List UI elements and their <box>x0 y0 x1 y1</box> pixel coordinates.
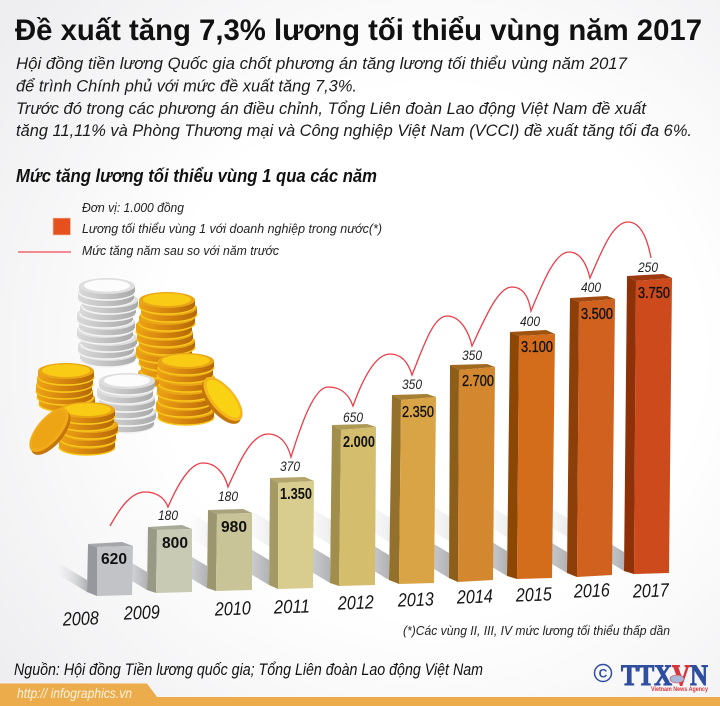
leaning coin right <box>194 371 250 430</box>
bar 2017 <box>624 274 672 574</box>
year labels: 2016 <box>573 580 611 603</box>
bar 2012 <box>330 424 376 586</box>
bar chart <box>87 274 672 596</box>
intro text block: để trình Chính phủ với mức đề xuất tăng 7,3%. <box>16 76 357 96</box>
year labels <box>62 580 670 631</box>
year labels: 2014 <box>456 586 493 609</box>
intro text block: Trước đó trong các phương án điều chỉnh, Tổng Liên đoàn Lao động Việt Nam đề xuất <box>16 99 647 118</box>
increase labels: 400 <box>581 280 601 295</box>
intro text block: Hội đồng tiền lương Quốc gia chốt phương án tăng lương tối thiểu vùng năm 2017 <box>16 54 628 73</box>
illustration: coin stacks <box>22 278 250 461</box>
footnote: (*)Các vùng II, III, IV mức lương tối thiểu thấp dần <box>403 623 670 638</box>
bar 2014 <box>449 364 495 582</box>
year labels: 2011 <box>273 596 310 619</box>
gold coin stack left <box>36 363 95 412</box>
bar 2009 <box>147 525 192 593</box>
leaning coin left <box>22 402 78 461</box>
bar shadows <box>57 497 624 592</box>
website url: http:// infographics.vn <box>17 685 132 701</box>
increase labels: 350 <box>462 348 482 363</box>
silver coin stack <box>77 278 138 367</box>
bar 2008: 620 <box>101 551 127 568</box>
bar 2015 <box>507 330 555 579</box>
bar 2014: 2.700 <box>462 373 494 390</box>
bar 2016 <box>567 296 615 577</box>
red increase arcs <box>110 222 651 526</box>
year labels: 2013 <box>397 589 435 612</box>
small silver coin stack <box>97 373 156 433</box>
bar 2011 <box>269 477 314 589</box>
bar 2008 <box>87 542 133 596</box>
year labels: 2017 <box>632 580 670 603</box>
copyright icon: C <box>599 666 608 680</box>
agency tagline: Vietnam News Agency <box>651 686 708 693</box>
bar 2017: 3.750 <box>638 285 670 302</box>
year labels: 2008 <box>62 608 100 631</box>
year labels: 2012 <box>337 592 375 615</box>
agency wordmark: TTXVN <box>621 659 708 692</box>
globe mark <box>670 675 684 683</box>
intro text block: tăng 11,11% và Phòng Thương mại và Công nghiệp Việt Nam (VCCI) đề xuất tăng tối đa 6%. <box>16 121 692 140</box>
legend unit: Đơn vị: 1.000 đồng <box>82 200 185 215</box>
increase labels: 250 <box>637 260 658 275</box>
legend label: yearly increase: Mức tăng năm sau so với năm trước <box>82 243 279 258</box>
bar 2009: 800 <box>162 535 188 552</box>
year labels: 2009 <box>123 602 161 625</box>
logo: copyright TTXVN <box>594 659 708 693</box>
source: Nguồn: Hội đồng Tiền lương quốc gia; Tổng Liên đoàn Lao động Việt Nam <box>14 661 483 679</box>
legend label: minimum wage: Lương tối thiểu vùng 1 với doanh nghiệp trong nước(*) <box>82 221 382 236</box>
bar 2013: 2.350 <box>402 404 434 421</box>
increase labels: 350 <box>402 377 422 392</box>
bar 2012: 2.000 <box>343 434 375 451</box>
legend swatch: minimum wage <box>53 218 70 235</box>
gold coin stack back <box>136 292 197 387</box>
footer band <box>0 684 720 706</box>
increase labels: 180 <box>218 489 238 504</box>
year labels: 2015 <box>515 584 553 607</box>
increase labels: 370 <box>280 459 300 474</box>
bar 2010 <box>207 509 252 591</box>
bar 2011: 1.350 <box>280 486 312 503</box>
increase labels: 400 <box>520 314 540 329</box>
year labels: 2010 <box>214 598 252 621</box>
increase labels: 180 <box>158 508 178 523</box>
legend line: yearly increase <box>18 251 71 253</box>
legend <box>18 200 382 258</box>
title: Đề xuất tăng 7,3% lương tối thiểu vùng năm 2017 <box>15 14 702 47</box>
increase labels <box>158 260 658 523</box>
chart heading: Mức tăng lương tối thiểu vùng 1 qua các năm <box>16 166 377 186</box>
gold coin stack lower <box>58 402 118 455</box>
bar 2013 <box>389 394 436 584</box>
intro text block <box>16 54 692 140</box>
bar 2015: 3.100 <box>521 339 553 356</box>
bar 2010: 980 <box>221 519 247 536</box>
increase labels: 650 <box>343 410 363 425</box>
bar 2016: 3.500 <box>581 306 613 323</box>
gold coin stack front <box>156 353 215 425</box>
